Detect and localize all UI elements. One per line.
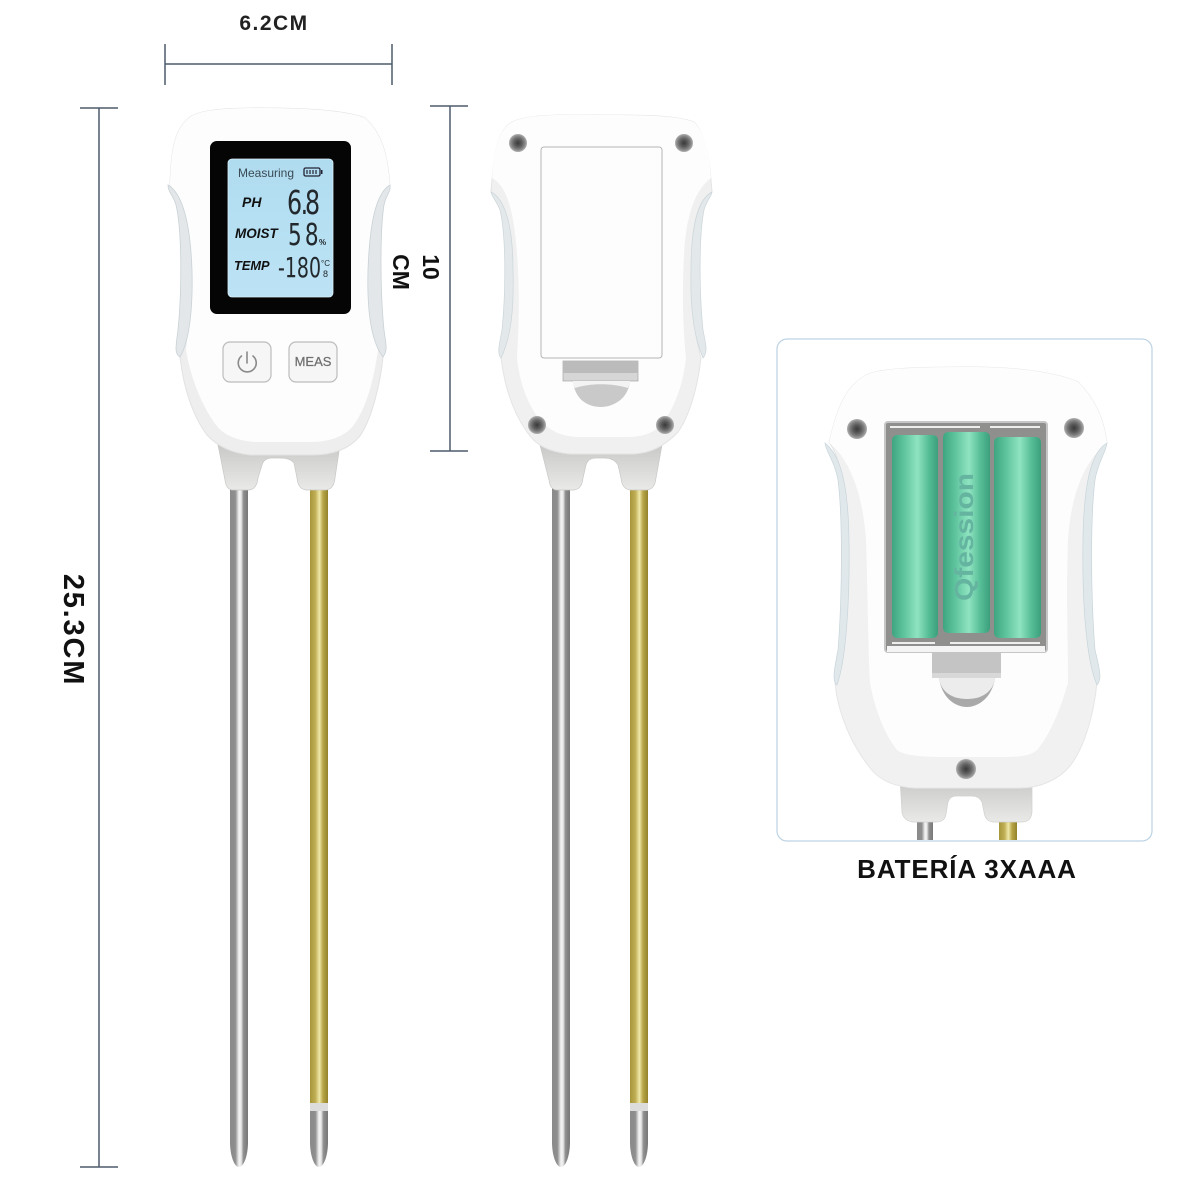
LCD display: Measuring	[238, 166, 294, 180]
LCD display: MOIST	[235, 226, 280, 241]
height dimension: 25.3CM: 25.3CM	[57, 574, 89, 686]
MEAS button: MEAS	[295, 354, 332, 369]
LCD display: °C	[321, 259, 330, 268]
battery cover	[541, 147, 662, 358]
batteries: Qfession	[949, 473, 979, 601]
LCD display: 8	[305, 219, 319, 253]
panel: battery compartment	[777, 339, 1152, 841]
LCD display: 5	[288, 219, 302, 253]
back inner face highlight	[492, 115, 711, 437]
back screws	[509, 134, 693, 434]
LCD display: 8	[305, 183, 320, 222]
battery icon	[304, 168, 322, 176]
cover thumb notch	[573, 381, 630, 407]
body height dimension: 10 CM	[388, 106, 468, 451]
front connectors	[218, 445, 340, 490]
battery compartment tray	[885, 422, 1047, 652]
back view of soil meter	[491, 115, 712, 1167]
LCD display: %	[319, 238, 326, 247]
LCD display: -180	[278, 251, 321, 284]
batteries	[890, 427, 1041, 643]
LCD display: TEMP	[234, 258, 270, 273]
back body shell	[491, 115, 712, 454]
body height dimension: 10 CM: 10	[418, 254, 444, 280]
MEAS button	[289, 342, 337, 382]
front probes	[230, 488, 328, 1167]
compartment thumb notch	[939, 678, 995, 707]
LCD display: 6	[287, 183, 302, 222]
battery view inner face highlight	[829, 367, 1107, 757]
battery view shell	[829, 367, 1107, 788]
LCD display: 8	[323, 269, 328, 279]
front side grips	[168, 185, 390, 357]
width dimension: 6.2CM	[165, 12, 392, 85]
battery view side grips	[825, 443, 1107, 685]
cover hinge	[563, 361, 638, 381]
body height dimension: 10 CM: CM	[388, 254, 414, 290]
front view of soil meter	[168, 108, 390, 1167]
screen bezel	[210, 141, 351, 314]
battery view probes	[917, 818, 1017, 840]
front body shell	[170, 108, 390, 455]
front inner face highlight	[170, 108, 390, 442]
compartment hinge	[932, 652, 1001, 678]
LCD display: .	[301, 183, 308, 222]
LCD display: PH	[242, 194, 262, 210]
width dimension: 6.2CM: 6.2CM	[239, 12, 309, 35]
back connectors	[540, 445, 662, 490]
battery caption: BATERÍA 3XAAA	[857, 854, 1077, 884]
battery view connectors	[900, 780, 1032, 822]
power button	[223, 342, 271, 382]
back probes	[552, 488, 648, 1167]
height dimension: 25.3CM	[57, 108, 118, 1167]
battery view screws	[847, 418, 1084, 779]
back side grips	[491, 192, 712, 358]
LCD display	[228, 159, 333, 297]
